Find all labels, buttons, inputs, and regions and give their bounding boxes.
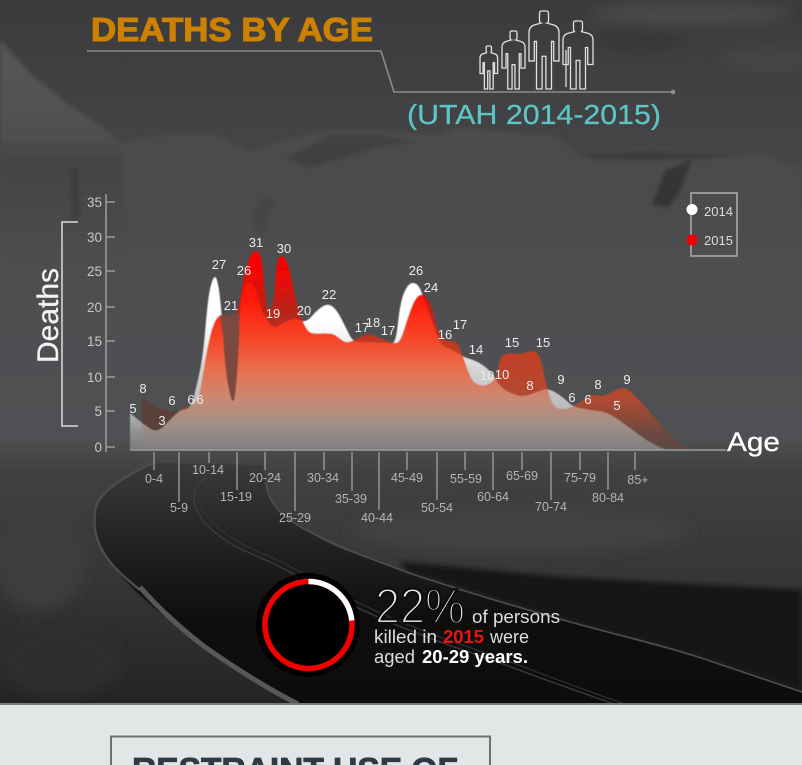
y axis: 5	[94, 404, 102, 419]
legend marker 2014	[686, 204, 698, 215]
x axis age group labels: 0-4	[145, 472, 163, 486]
x axis age group labels: 65-69	[506, 469, 538, 483]
x axis age group labels: 75-79	[564, 471, 596, 485]
data value labels: 15	[505, 335, 519, 350]
y axis: 25	[87, 264, 102, 279]
x axis age group labels: 40-44	[361, 511, 393, 525]
callout: 22 percent statistic: killed in	[374, 627, 437, 647]
data value labels: 19	[266, 306, 280, 321]
data value labels	[129, 235, 631, 428]
restraint section heading box	[111, 736, 490, 765]
data value labels: 6	[584, 392, 592, 407]
lit grass patches	[0, 508, 775, 695]
x axis title: Age	[727, 427, 780, 457]
data value labels: 27	[212, 257, 226, 272]
chart baseline	[130, 449, 726, 451]
callout: 22 percent statistic: 2015	[443, 627, 484, 647]
data value labels: 10	[480, 368, 494, 383]
data value labels: 16	[438, 327, 452, 342]
data value labels: 18	[366, 315, 380, 330]
x axis age group labels: 15-19	[220, 490, 252, 504]
data value labels: 8	[139, 381, 147, 396]
x axis age group labels: 20-24	[249, 471, 281, 485]
brown region: 2015 above 2014 at young ages	[142, 398, 180, 430]
x axis age group labels: 45-49	[391, 471, 423, 485]
area: overlap of both years	[142, 282, 666, 450]
data value labels: 6	[168, 393, 176, 408]
title: DEATHS BY AGE	[91, 11, 373, 48]
title leader line	[87, 51, 675, 94]
callout: 22 percent statistic: 20-29 years.	[422, 647, 528, 667]
data value labels: 30	[277, 241, 291, 256]
data value labels: 17	[355, 320, 369, 335]
area: 2014	[130, 277, 667, 450]
data value labels: 15	[536, 335, 550, 350]
clouds	[590, 4, 802, 70]
callout: 22 percent statistic	[374, 580, 560, 667]
data value labels: 5	[129, 401, 137, 416]
far shoulder shadow	[400, 562, 802, 692]
subtitle: (UTAH 2014-2015)	[407, 99, 661, 130]
x axis age group labels: 85+	[627, 473, 649, 487]
x axis age group labels: 25-29	[279, 511, 311, 525]
data value labels: 22	[322, 287, 336, 302]
data value labels: 9	[557, 372, 565, 387]
legend	[686, 193, 737, 256]
y axis title with bracket: Deaths	[32, 268, 65, 363]
y axis: 30	[87, 230, 102, 245]
callout: 22 percent statistic: aged	[374, 647, 415, 667]
x axis age group labels	[145, 452, 649, 525]
donut chart: 22 percent	[256, 573, 360, 677]
data value labels: 6	[187, 392, 195, 407]
data value labels: 26	[237, 263, 251, 278]
x axis age group labels: 35-39	[335, 492, 367, 506]
y axis: 0	[94, 440, 102, 455]
callout: 22 percent statistic: of persons	[472, 607, 560, 627]
y axis: 15	[87, 334, 102, 349]
legend marker 2015	[686, 234, 698, 246]
y axis: 20	[87, 300, 102, 315]
mountains	[0, 40, 802, 280]
x axis age group labels: 50-54	[421, 501, 453, 515]
legend: 2015	[704, 233, 733, 248]
data value labels: 24	[424, 280, 438, 295]
x axis age group labels: 10-14	[192, 463, 224, 477]
callout: 22 percent statistic: were	[489, 627, 529, 647]
y axis: 10	[87, 370, 102, 385]
road	[94, 463, 802, 704]
x axis age group labels: 80-84	[592, 491, 624, 505]
data value labels: 17	[453, 317, 467, 332]
data value labels: 9	[623, 372, 631, 387]
data value labels: 31	[249, 235, 263, 250]
x axis age group labels: 5-9	[170, 501, 188, 515]
x axis age group labels: 70-74	[535, 500, 567, 514]
data value labels: 14	[469, 342, 483, 357]
data value labels: 8	[526, 378, 534, 393]
data value labels: 26	[409, 263, 423, 278]
data value labels: 10	[495, 367, 509, 382]
bottom light panel	[0, 703, 802, 765]
data value labels: 6	[196, 392, 204, 407]
data value labels: 6	[568, 390, 576, 405]
data value labels: 17	[381, 323, 395, 338]
area: 2015	[142, 251, 700, 450]
x axis age group labels: 30-34	[307, 471, 339, 485]
icon: family of four figures	[480, 11, 593, 89]
area chart: 2014 vs 2015	[130, 251, 700, 450]
trough: 2015 over dip in 2014	[220, 313, 240, 401]
y axis title with bracket	[32, 222, 78, 426]
y axis	[87, 194, 115, 455]
data value labels: 20	[297, 303, 311, 318]
callout: 22 percent statistic: 22%	[375, 580, 465, 634]
data value labels: 3	[158, 413, 166, 428]
x axis age group labels: 60-64	[477, 490, 509, 504]
data value labels: 8	[594, 377, 602, 392]
y axis: 35	[87, 195, 102, 210]
x axis age group labels: 55-59	[450, 472, 482, 486]
data value labels: 21	[224, 298, 238, 313]
legend: 2014	[704, 204, 733, 219]
data value labels: 5	[613, 398, 621, 413]
